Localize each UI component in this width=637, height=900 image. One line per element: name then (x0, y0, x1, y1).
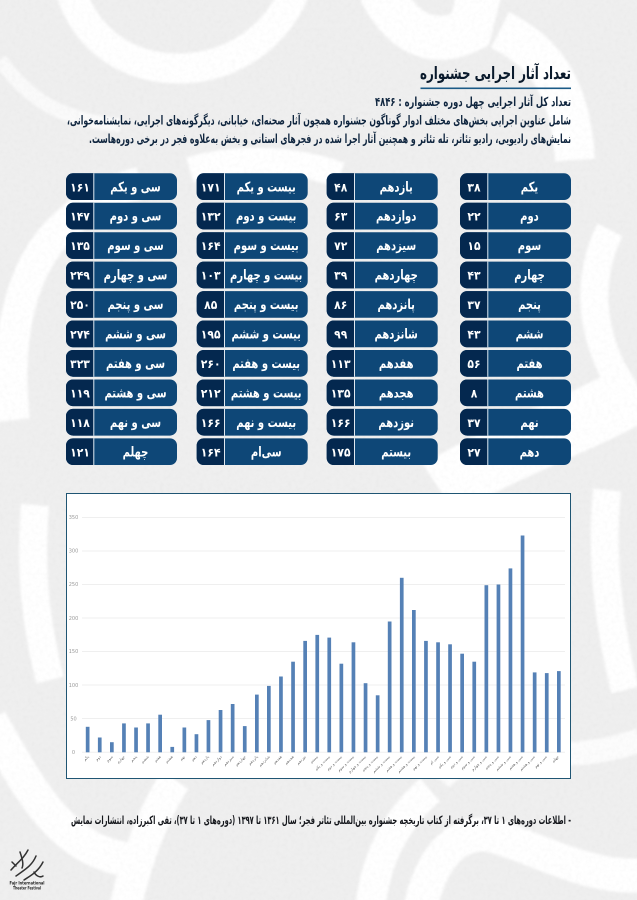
x axis labels: سی و هشتم (518, 754, 536, 772)
column: periods 1 to 10: ۳۷ (467, 415, 481, 430)
column: periods 11 to 20: چهاردهم (375, 267, 418, 284)
column: periods 21 to 30: ۱۶۴ (201, 239, 221, 253)
column: periods 11 to 20: هفدهم (379, 355, 414, 371)
x axis labels: سی و چهارم (470, 754, 488, 772)
column: periods 11 to 20: ۶۳ (334, 209, 347, 224)
column: periods 11 to 20: هجدهم (379, 385, 414, 401)
column: periods 31 to 40: چهلم (123, 444, 148, 461)
column: periods 21 to 30: ۱۰۳ (201, 268, 221, 283)
column: periods 21 to 30: بیست و ششم (231, 326, 301, 343)
column: periods 21 to 30: بیست و چهارم (230, 267, 302, 284)
column: periods 1 to 10: ۵۶ (467, 356, 481, 371)
column: periods 1 to 10: ۲۲ (467, 209, 481, 224)
column: periods 11 to 20: بیستم (381, 444, 411, 460)
column: periods 11 to 20: ۳۹ (334, 268, 347, 283)
x axis labels: شانزدهم (257, 754, 271, 767)
x axis labels: چهاردهم (234, 754, 247, 767)
y axis labels: 250 (69, 582, 78, 588)
x axis labels: چهلم (551, 754, 560, 763)
y axis labels: 100 (69, 683, 78, 689)
column: periods 31 to 40: سی و دوم (110, 208, 161, 225)
column: periods 21 to 30: بیست و هفتم (232, 355, 300, 373)
column: periods 1 to 10: سوم (518, 238, 541, 255)
column: periods 31 to 40: ۲۷۴ (70, 327, 90, 342)
x axis labels: بیستم (309, 754, 319, 764)
column: periods 21 to 30: بیست و سوم (234, 238, 299, 255)
y axis labels: 200 (69, 616, 78, 622)
column: periods 1 to 10: ۴۳ (467, 268, 481, 283)
source footnote: - اطلاعات دوره‌های ۱ تا ۳۷، برگرفته از کتاب تاریخچه جشنواره بین‌المللی تئاتر فجر؛ سال ۱۳۶۱ تا ۱۳۹۷ (دوره‌های ۱ تا ۳۷)، تقی اکبرزاده، انتشارات نمایش (71, 813, 571, 828)
column: periods 31 to 40: سی و نهم (110, 414, 161, 431)
x axis labels: پنجم (129, 754, 138, 763)
bars (86, 536, 561, 752)
column: periods 21 to 30: بیست و پنجم (234, 297, 298, 314)
column: periods 31 to 40: ۲۵۰ (70, 298, 90, 312)
column: periods 21 to 30: ۱۳۲ (201, 209, 221, 224)
x axis labels: سی و دوم (449, 754, 464, 769)
x axis labels: هفتم (153, 754, 162, 763)
column: periods 21 to 30: ۱۷۱ (201, 180, 221, 194)
column: periods 11 to 20: سیزدهم (376, 238, 416, 255)
x axis labels: دوازدهم (210, 754, 223, 767)
column: periods 1 to 10: پنجم (518, 297, 541, 313)
panel: festival periods table (66, 173, 571, 465)
y axis labels: 50 (70, 716, 77, 722)
column: periods 31 to 40: ۱۳۵ (70, 239, 90, 253)
column: periods 11 to 20: ۱۶۶ (331, 415, 351, 430)
column: periods 31 to 40 (66, 173, 177, 465)
x axis labels (82, 754, 560, 774)
column: periods 31 to 40: ۱۱۹ (70, 386, 90, 401)
column: periods 21 to 30: بیست و یکم (237, 179, 296, 196)
x axis labels: دهم (190, 754, 198, 762)
column: periods 31 to 40: سی و سوم (107, 238, 164, 255)
column: periods 21 to 30: بیست و هشتم (231, 385, 302, 402)
column: periods 31 to 40: سی و یکم (110, 179, 161, 196)
x axis labels: بیست و چهارم (347, 754, 367, 774)
column: periods 1 to 10: یکم (521, 179, 538, 195)
column: periods 11 to 20: ۱۷۵ (331, 445, 351, 460)
column: periods 21 to 30: بیست و دوم (236, 208, 296, 225)
x axis labels: بیست و ششم (371, 754, 391, 774)
column: periods 11 to 20: یازدهم (380, 179, 413, 196)
y axis labels: 300 (69, 548, 78, 554)
x axis labels: چهارم (115, 754, 126, 764)
x axis labels: سیزدهم (222, 754, 235, 767)
title: تعداد آثار اجرایی جشنواره (420, 62, 571, 84)
bar chart: works per festival period (66, 494, 570, 778)
x axis labels: پانزدهم (247, 754, 259, 766)
column: periods 11 to 20: ۷۲ (334, 239, 347, 253)
column: periods 1 to 10: چهارم (514, 267, 545, 284)
column: periods 31 to 40: سی و هشتم (104, 385, 167, 402)
column: periods 1 to 10: ۸ (471, 386, 477, 401)
column: periods 21 to 30: ۸۵ (204, 298, 217, 312)
column: periods 11 to 20: ۱۳۵ (331, 386, 351, 401)
column: periods 21 to 30: بیست و نهم (236, 414, 296, 431)
x axis labels: هجدهم (283, 754, 295, 765)
column: periods 11 to 20: ۱۱۳ (331, 356, 351, 371)
column: periods 1 to 10 (460, 173, 571, 465)
x axis labels: بیست و هشتم (396, 754, 416, 774)
y axis labels: 150 (69, 649, 78, 655)
column: periods 1 to 10: نهم (520, 414, 539, 431)
column: periods 31 to 40: ۲۴۹ (70, 268, 90, 283)
x axis labels: سوم (105, 754, 114, 763)
x axis labels: سی و هفتم (507, 754, 524, 771)
intro text block (67, 94, 571, 146)
column: periods 21 to 30: سی‌ام (251, 444, 282, 460)
column: periods 21 to 30: ۲۶۰ (201, 356, 221, 371)
x axis labels: بیست و سوم (336, 754, 355, 773)
column: periods 31 to 40: سی و پنجم (108, 297, 163, 314)
column: periods 21 to 30: ۱۶۶ (201, 415, 221, 430)
column: periods 1 to 10: دوم (520, 208, 539, 225)
column: periods 11 to 20: ۴۸ (334, 180, 347, 194)
x axis labels: دوم (94, 754, 102, 762)
column: periods 1 to 10: ۳۸ (467, 180, 481, 194)
x axis labels: سی و ششم (494, 754, 512, 772)
column: periods 21 to 30: ۱۶۴ (201, 445, 221, 460)
x axis labels: سی و یکم (437, 754, 452, 769)
y axis labels: 0 (72, 750, 75, 756)
x axis labels: سی و سوم (459, 754, 476, 771)
x axis labels: ششم (140, 754, 150, 764)
column: periods 1 to 10: دهم (520, 444, 539, 460)
column: periods 11 to 20: شانزدهم (375, 326, 418, 343)
y axis labels: 350 (69, 515, 78, 521)
x axis labels: سی و پنجم (484, 754, 500, 770)
column: periods 31 to 40: ۱۴۷ (70, 209, 90, 224)
column: periods 31 to 40: ۳۲۳ (70, 356, 90, 371)
x axis labels: بیست و هفتم (384, 754, 403, 773)
logo: Fajr International Theater Festival: Theater Festival (13, 886, 41, 890)
logo: Fajr International Theater Festival (10, 850, 45, 890)
column: periods 1 to 10: ششم (516, 326, 543, 342)
column: periods 1 to 10: هشتم (515, 385, 544, 401)
column: periods 1 to 10: ۴۳ (467, 327, 481, 342)
x axis labels: سی و نهم (533, 754, 548, 769)
column: periods 1 to 10: ۲۷ (467, 445, 481, 460)
column: periods 21 to 30 (197, 173, 308, 465)
column: periods 31 to 40: ۱۶۱ (70, 180, 90, 194)
column: periods 31 to 40: سی و هفتم (106, 355, 165, 373)
column: periods 11 to 20: دوازدهم (376, 208, 416, 225)
column: periods 31 to 40: سی و چهارم (104, 267, 167, 284)
x axis labels: یازدهم (199, 754, 210, 765)
column: periods 31 to 40: ۱۲۱ (70, 445, 90, 460)
x axis labels: بیست و پنجم (360, 754, 379, 772)
y axis labels (69, 515, 78, 756)
column: periods 11 to 20 (327, 173, 438, 465)
x axis labels: بیست و دوم (325, 754, 343, 771)
x axis labels: هفدهم (272, 754, 283, 765)
column: periods 11 to 20: ۹۹ (334, 327, 347, 342)
column: periods 21 to 30: ۱۹۵ (201, 327, 221, 342)
column: periods 1 to 10: ۳۷ (467, 298, 481, 312)
x axis labels: بیست و یکم (314, 754, 331, 771)
column: periods 31 to 40: سی و ششم (105, 326, 166, 343)
x axis labels: سی ام (428, 754, 440, 765)
x axis labels: نوزدهم (295, 754, 307, 766)
x axis labels: هشتم (164, 754, 174, 764)
column: periods 11 to 20: ۸۶ (334, 298, 347, 312)
column: periods 1 to 10: ۱۵ (467, 239, 481, 253)
x axis labels: نهم (178, 754, 186, 761)
x axis labels: یکم (82, 754, 90, 762)
column: periods 11 to 20: پانزدهم (378, 297, 415, 314)
column: periods 31 to 40: ۱۱۸ (70, 415, 90, 430)
column: periods 21 to 30: ۲۱۲ (201, 386, 221, 401)
x axis labels: بیست و نهم (411, 754, 428, 771)
logo: Fajr International Theater Festival: Fajr International (10, 880, 45, 886)
column: periods 11 to 20: نوزدهم (378, 414, 414, 431)
column: periods 1 to 10: هفتم (517, 355, 542, 371)
